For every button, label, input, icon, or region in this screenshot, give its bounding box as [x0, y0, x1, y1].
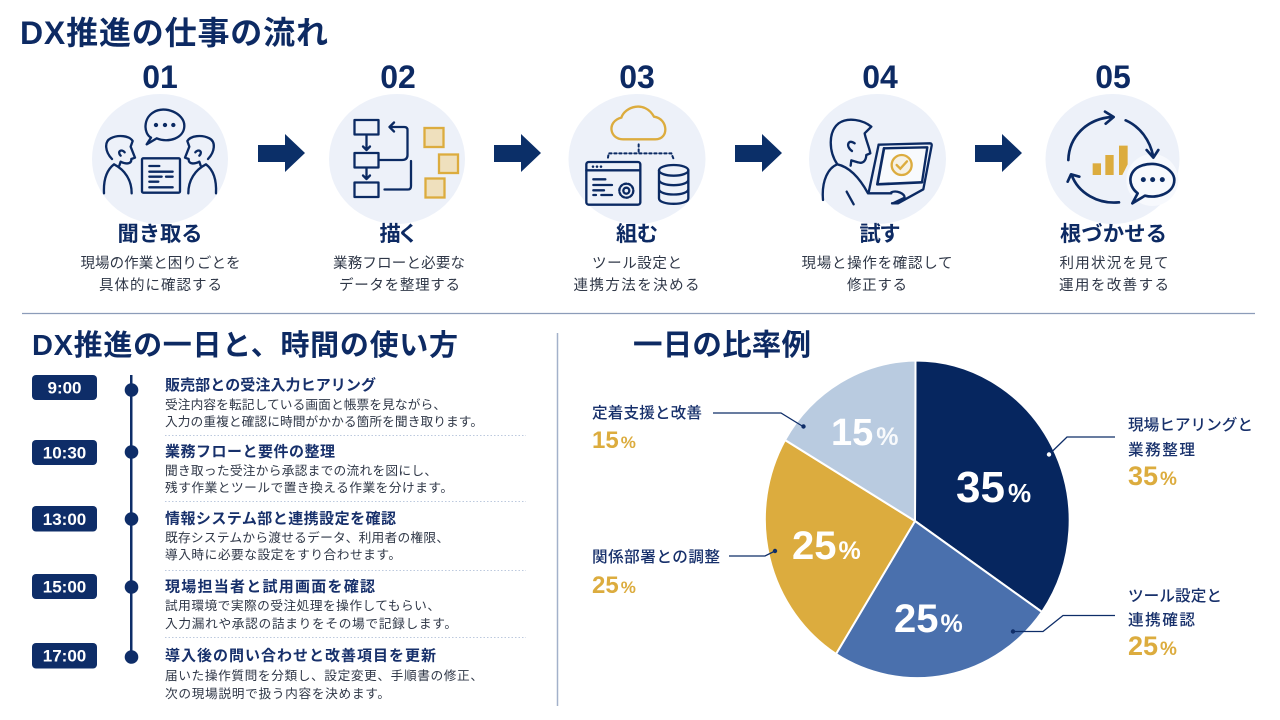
callout: tools	[1011, 587, 1222, 661]
step label: 描く	[380, 222, 418, 246]
callout: hearing: 現場ヒアリングと	[1128, 416, 1253, 434]
entry 10:30: 10:30	[43, 444, 86, 462]
step description: 運用を改善する	[1059, 277, 1169, 294]
callout: support: 15%	[592, 427, 636, 454]
step label: 試す	[860, 222, 900, 246]
icon: cloud and systems	[568, 94, 706, 224]
title: DX推進の仕事の流れ	[20, 15, 328, 51]
step description: 修正する	[847, 277, 907, 294]
callout: tools: ツール設定と	[1128, 587, 1222, 605]
panel: daily ratio	[592, 329, 1253, 678]
step 03	[568, 59, 706, 294]
step description	[574, 255, 700, 294]
entry 15:00: 現場担当者と試用画面を確認	[165, 578, 375, 596]
entry 17:00	[32, 643, 483, 701]
step description: 利用状況を見て	[1060, 255, 1168, 272]
step number 04: 04	[862, 59, 898, 95]
entry 17:00: 17:00	[43, 646, 86, 666]
slice 25% gold	[765, 440, 915, 654]
icon: flow diagram	[329, 94, 465, 224]
callout: tools: 連携確認	[1128, 611, 1195, 629]
step description: 現場と操作を確認して	[802, 255, 952, 272]
entry 13:00: 情報システム部と連携設定を確認	[165, 510, 396, 528]
pie value 35%: 35%	[956, 463, 1031, 512]
pie value 25% blue: 25%	[894, 597, 963, 641]
entry 10:30: 残す作業とツールで置き換える作業を分けます。	[165, 480, 453, 495]
entry 15:00	[32, 574, 457, 631]
step description: 現場の作業と困りごとを	[80, 255, 240, 272]
entry 9:00	[32, 375, 483, 429]
arrow 1	[258, 134, 305, 172]
schedule heading: DX推進の一日と、時間の使い方	[32, 329, 458, 362]
pie chart	[765, 360, 1070, 678]
arrow 4	[975, 134, 1022, 172]
ratio heading: 一日の比率例	[633, 329, 811, 362]
step 01	[80, 59, 240, 294]
panel: daily schedule	[32, 329, 526, 701]
pie value 15%: 15%	[831, 412, 899, 454]
entry 13:00: 導入時に必要な設定をすり合わせます。	[165, 548, 401, 562]
entry 9:00: 入力の重複と確認に時間がかかる箇所を聞き取ります。	[165, 414, 483, 429]
entry 15:00: 試用環境で実際の受注処理を操作してもらい、	[165, 598, 440, 613]
entry 15:00: 15:00	[43, 578, 86, 596]
step number 02: 02	[380, 59, 416, 95]
entry 10:30: 業務フローと要件の整理	[165, 442, 335, 460]
entry 17:00: 導入後の問い合わせと改善項目を更新	[165, 646, 436, 664]
entry 17:00: 届いた操作質問を分類し、設定変更、手順書の修正、	[165, 668, 483, 683]
slice 25% blue	[836, 521, 1042, 678]
callout: tools: 25%	[1128, 631, 1177, 661]
arrow 2	[494, 134, 541, 172]
entry 13:00: 13:00	[43, 510, 86, 529]
step description: 具体的に確認する	[99, 277, 222, 294]
callout: support: 定着支援と改善	[592, 404, 702, 422]
callout: hearing: 業務整理	[1128, 441, 1195, 459]
callout: coordination: 関係部署との調整	[592, 548, 720, 566]
callout: support	[592, 404, 806, 454]
slice 15%	[785, 360, 916, 521]
step description: ツール設定と	[592, 255, 682, 272]
step label: 根づかせる	[1060, 222, 1167, 246]
step label: 聞き取る	[118, 222, 202, 246]
step description	[802, 255, 952, 294]
entry 9:00: 受注内容を転記している画面と帳票を見ながら、	[165, 397, 446, 412]
entry 9:00: 販売部との受注入力ヒアリング	[165, 376, 376, 394]
entry 9:00: 9:00	[47, 378, 82, 398]
step label: 組む	[616, 222, 658, 246]
icon: improvement cycle	[1046, 94, 1180, 224]
step number 03: 03	[619, 59, 655, 95]
step 02	[329, 59, 465, 294]
entry 10:30: 聞き取った受注から承認までの流れを図にし、	[165, 464, 437, 478]
step description: 業務フローと必要な	[333, 255, 465, 272]
timeline line and dots	[125, 375, 138, 664]
step description	[333, 255, 465, 294]
step description	[1059, 255, 1169, 294]
step number 01: 01	[142, 59, 178, 95]
step number 05: 05	[1095, 59, 1131, 95]
entry 13:00: 既存システムから渡せるデータ、利用者の権限、	[165, 530, 449, 545]
step description: データを整理する	[339, 276, 460, 294]
step 04	[802, 59, 952, 294]
callout: hearing	[1047, 416, 1253, 491]
callout: hearing: 35%	[1128, 461, 1177, 491]
icon: person testing on laptop	[809, 94, 946, 224]
step description: 連携方法を決める	[574, 277, 700, 294]
slice 35%	[915, 360, 1070, 612]
step 05	[1046, 59, 1180, 294]
entry 15:00: 入力漏れや承認の詰まりをその場で記録します。	[165, 616, 457, 631]
step description	[80, 255, 240, 294]
icon: hearing conversation	[92, 94, 228, 224]
entry 17:00: 次の現場説明で扱う内容を決めます。	[165, 686, 390, 701]
arrow 3	[735, 134, 782, 172]
pie value 25% gold: 25%	[792, 524, 861, 568]
callout: coordination	[592, 548, 777, 599]
callout: coordination: 25%	[592, 572, 636, 599]
entry 10:30	[32, 440, 453, 495]
entry 13:00	[32, 506, 449, 562]
